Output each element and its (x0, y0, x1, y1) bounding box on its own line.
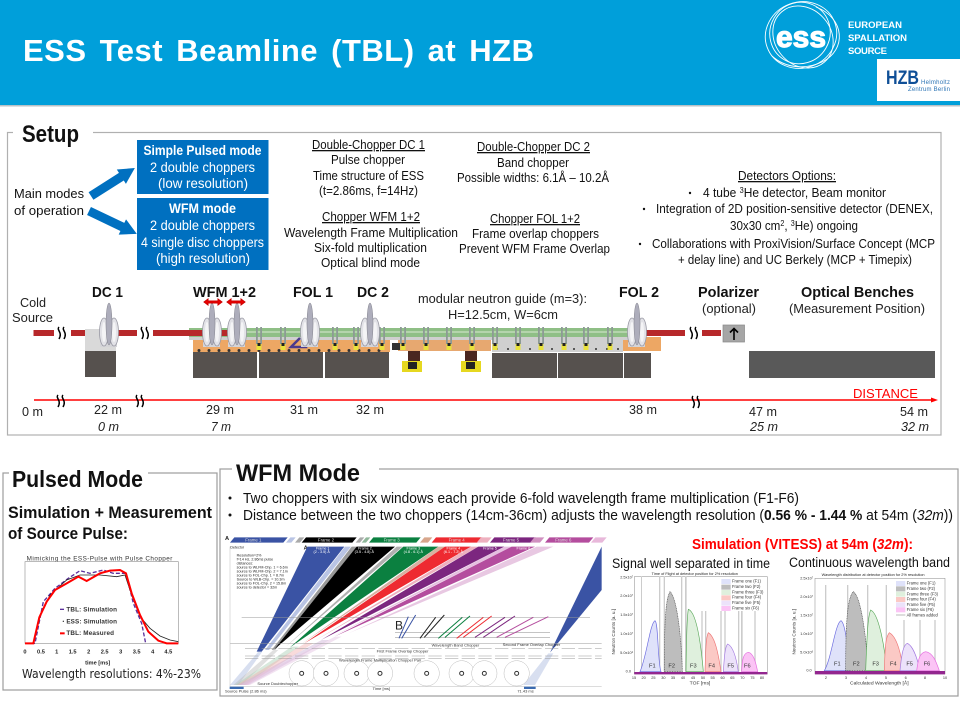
DC 1 base (85, 329, 116, 377)
beamline component labels: FOL 1 (293, 284, 333, 301)
x axis labels: 2 (87, 650, 90, 656)
legend: TBL: Measured (66, 630, 114, 637)
beamline component labels: DC 1 (92, 284, 123, 301)
frame color bar: Frame 6 (555, 538, 572, 543)
legend: Frame five (F5) (907, 602, 936, 607)
resolution notes: Source to WLB-Chp. = 10.3m (237, 577, 285, 581)
frame peaks: F1 (649, 663, 656, 669)
beamline schematic (34, 299, 935, 378)
axes labels: 15 (632, 676, 636, 680)
wedge labels: Frame 6 (517, 546, 530, 550)
arrow: to simple pulsed mode (86, 161, 139, 203)
text: wavelength resolutions: Wavelength resolutions: 4%-23% (22, 667, 201, 681)
resolution notes (230, 545, 288, 589)
beamline component labels: modular neutron guide (m=3): (418, 291, 587, 306)
axes labels: TOF [ms] (690, 681, 711, 687)
text: chopper WFM 1+2 (284, 209, 458, 270)
axes labels: 8 (924, 676, 926, 680)
axes labels: 10 (943, 676, 947, 680)
axes labels: 35 (671, 676, 675, 680)
text: detector options: 4 tube (703, 185, 739, 200)
x axis labels: 0.5 (37, 650, 45, 656)
frame peaks: F5 (906, 661, 913, 667)
logo: HZB: HZB (886, 68, 919, 89)
WFM adjustment arrows (204, 299, 245, 305)
beamline component labels: H=12.5cm, W=6cm (448, 307, 558, 322)
wedge labels: (3.5 - 4.8) Å (355, 549, 375, 554)
legend: Frame six (F6) (732, 605, 760, 610)
curve: ESS simulation (25, 575, 178, 643)
legend (721, 579, 764, 611)
frame peaks: F6 (744, 663, 751, 669)
bullet list: Two choppers with six windows each provide 6-fold wavelength frame multiplication (F1-F6) (243, 491, 799, 507)
axes labels: 30 (661, 676, 665, 680)
text: chopper WFM 1+2: Wavelength Frame Multiplication (284, 225, 458, 240)
text: double-chopper DC 1: Pulse chopper (331, 152, 406, 167)
beamline component labels: Source (12, 310, 53, 325)
letter A labels: A (225, 536, 229, 542)
distance axis: 32 m (356, 402, 384, 417)
frame peaks: F5 (727, 663, 734, 669)
wedge labels: (2 - 3.5) Å (314, 549, 330, 554)
legend: Frame five (F5) (732, 600, 761, 605)
resolution notes: Resolution=2% (237, 553, 262, 557)
text: double-chopper DC 2: Band chopper (497, 155, 570, 170)
wedge labels: Frame 4 (447, 546, 460, 550)
axes labels: 1.5x10⁷ (620, 613, 634, 617)
inset B: B (395, 618, 403, 632)
beamline component labels: DC 2 (357, 284, 389, 301)
header banner (0, 0, 960, 106)
legend: Frame four (F4) (732, 595, 762, 600)
text: signal well separated in time: Signal well separated in time (612, 556, 770, 571)
heading: pulsed mode: Pulsed Mode (12, 466, 143, 492)
logo: European Spallation Source: EUROPEAN (848, 20, 902, 31)
beamline component labels: Polarizer (698, 284, 759, 301)
axes labels: 6 (905, 676, 907, 680)
x axis labels: time [ms] (85, 661, 110, 667)
chart: time of flight (611, 572, 767, 687)
text: double-chopper DC 1: Double-Chopper DC 1 (312, 137, 425, 152)
x axis labels: 2.5 (101, 650, 109, 656)
distance axis: 25 m (749, 419, 778, 434)
chart: wavelength distribution: Wavelength distribution at detector position for 2% resolution (822, 573, 925, 577)
axes labels (792, 576, 947, 687)
resolution notes: source to FOL-Chp. 1 = 8.7m (237, 573, 284, 577)
distance axis: 54 m (900, 404, 928, 419)
axes labels: 5.0x10⁶ (620, 651, 634, 655)
frame color bar: Frame 5 (503, 538, 520, 543)
legend: Frame one (F1) (732, 579, 761, 584)
wedge labels (314, 546, 530, 554)
frame color bar: Frame 2 (318, 538, 335, 543)
text: double-chopper DC 1: Time structure of ESS (313, 168, 424, 183)
text: double-chopper DC 2: Possible widths: 6.1Å – 10.2Å (457, 170, 609, 185)
frame peaks: F2 (853, 661, 860, 667)
distance axis: 32 m (901, 419, 929, 434)
resolution notes: f=14 Hz, 2.86ms pulse (237, 557, 273, 561)
colored frame wedges (257, 547, 602, 653)
axes labels: 0.0 (806, 668, 812, 672)
chopper discs (289, 661, 529, 686)
distance axis: 31 m (290, 402, 318, 417)
guide pedestals (392, 343, 481, 372)
box: WFM mode: 4 single disc choppers (141, 234, 264, 250)
axes labels: 80 (760, 676, 764, 680)
neutron beam (34, 327, 721, 339)
logo: European Spallation Source: ess (776, 21, 826, 54)
curve: TBL simulation (25, 570, 146, 643)
axes labels: Calculated Wavelength [Å] (850, 680, 909, 687)
text: detector options: , (784, 218, 791, 233)
distance axis: 38 m (629, 402, 657, 417)
neutron guide (189, 328, 640, 340)
box: simple pulsed mode: (low resolution) (158, 175, 248, 191)
frame color bar: Frame 1 (245, 538, 262, 543)
heading: setup: Setup (22, 121, 79, 148)
logo: HZB: Helmholtz (921, 80, 950, 86)
box: WFM mode: WFM mode (169, 200, 236, 216)
resolution notes: Detector (230, 545, 245, 549)
axes labels: 20 (642, 676, 646, 680)
text: double-chopper DC 2 (457, 139, 609, 185)
optical benches (749, 351, 935, 378)
frame color bar: Frame 4 (449, 538, 465, 543)
text: detector options: Integration of 2D position-sensitive detector (DENEX, (656, 201, 933, 216)
arrow: to WFM mode (85, 203, 140, 242)
distance axis (22, 386, 938, 434)
logo: HZB: Zentrum Berlin (908, 87, 950, 93)
distance axis: 0 m (22, 404, 43, 419)
frame color bar: Frame 3 (384, 538, 400, 543)
resolution notes: source to WLFM-Chp. 2 = 7.1m (237, 569, 288, 573)
wedge labels: Frame 1 (316, 546, 329, 550)
axes labels: 0.0 (626, 670, 631, 674)
x axis labels: 1.5 (69, 650, 77, 656)
text: detector options: Detectors Options: (738, 168, 836, 183)
diagram labels: 71.43 ms (517, 688, 534, 693)
x axis labels: 0 (23, 650, 27, 656)
legend (896, 581, 939, 617)
light rays from source (230, 637, 553, 685)
chart: time of flight: Time of Flight at detector position for 2% resolution (652, 572, 738, 576)
box: WFM mode: (high resolution) (156, 250, 250, 266)
inset B (395, 615, 550, 638)
distance axis: 7 m (211, 419, 231, 434)
baseline band (634, 672, 767, 674)
text: detector options: 30x30 cm (730, 218, 786, 233)
subheading: simulation and measurement: of Source Pulse: (8, 524, 128, 543)
wedge labels: Frame 3 (407, 546, 420, 550)
panel: WFM mode (220, 460, 958, 696)
diagram labels: Wavelength Band Chopper (432, 643, 480, 648)
resolution notes: source to detector = 32m (237, 585, 277, 589)
x axis labels: 1 (55, 650, 58, 656)
axes labels: Neutron Counts [a. u.] (792, 609, 797, 654)
logo: HZB (877, 59, 960, 101)
wedge labels: (4.8 - 6.1) Å (404, 549, 424, 554)
choppers (100, 303, 646, 347)
diagram labels: Source Pulse (2.86 ms) (225, 688, 267, 693)
axes labels: 65 (730, 676, 734, 680)
resolution notes: distances: (237, 561, 253, 565)
wedge labels: Frame 2 (358, 546, 372, 550)
x axis labels: 3.5 (133, 650, 141, 656)
legend: Frame six (F6) (907, 607, 934, 612)
axes labels (611, 576, 764, 687)
axes labels: 50 (701, 676, 705, 680)
text: main modes of operation (14, 186, 84, 218)
text: detector options: Collaborations with ProxiVision/Surface Concept (MCP (652, 236, 935, 251)
distance grid lines (230, 547, 602, 687)
axes labels: 2 (825, 676, 827, 680)
legend: Frame two (F2) (907, 586, 936, 591)
chart: source pulse (23, 556, 178, 667)
panel: setup (8, 121, 941, 435)
chart: wavelength distribution (792, 573, 947, 687)
axes labels: 5 (885, 676, 887, 680)
letter A labels: A (304, 545, 308, 551)
axes labels: 1.0x10⁷ (620, 632, 634, 636)
frame peaks: F4 (890, 661, 897, 667)
diagram labels (225, 642, 561, 693)
polarizer (723, 325, 744, 342)
diagram labels: Time [ms] (373, 686, 390, 691)
wedge labels: (6.1 - 7.2) Å (444, 549, 464, 554)
purple wedge at FOL 1 (291, 326, 306, 347)
bullet list (228, 491, 953, 524)
box: simple pulsed mode (137, 140, 268, 194)
curve: TBL measured (25, 570, 178, 643)
title: ESS Test Beamline (TBL) at HZB (23, 33, 534, 68)
axes labels: 2.5x10⁷ (800, 576, 814, 580)
diagram labels: Second Frame Overlap Chopper (503, 642, 561, 647)
text: detector options: 3 (791, 219, 795, 228)
beamline component labels: Optical Benches (801, 284, 914, 301)
axes labels: 45 (691, 676, 695, 680)
legend: Frame three (F3) (732, 589, 764, 594)
diagram labels: Source Doublechopper (257, 681, 299, 686)
letter A labels (225, 536, 308, 551)
axes labels: 75 (750, 676, 754, 680)
resolution notes: source to FOL-Chp. 2 = 15.8m (237, 581, 286, 585)
box: WFM mode: 2 double choppers (150, 217, 255, 233)
legend: Frame three (F3) (907, 591, 939, 596)
distance axis: 0 m (98, 419, 119, 434)
logo: European Spallation Source: SOURCE (848, 46, 887, 57)
subheading: simulation and measurement (8, 503, 212, 543)
text: detector options: 2 (780, 219, 785, 228)
distance axis: 47 m (749, 404, 777, 419)
heading: simulation VITESS: Simulation (VITESS) at 54m (32m): (692, 537, 913, 553)
frame peaks: F2 (668, 663, 675, 669)
text: main modes of operation: Main modes (14, 186, 84, 201)
text: double-chopper DC 1 (312, 137, 425, 198)
axes labels: 1.5x10⁷ (800, 613, 814, 617)
text: chopper FOL 1+2: Prevent WFM Frame Overlap (459, 241, 610, 256)
axes labels: 2.0x10⁷ (620, 594, 634, 598)
frame peaks: F6 (924, 661, 930, 667)
beamline component labels: FOL 2 (619, 284, 659, 301)
x axis labels: 4.5 (164, 650, 172, 656)
subheading: simulation and measurement: Simulation + Measurement (8, 503, 212, 522)
text: continuous wavelength band: Continuous wavelength band (789, 555, 950, 570)
axes labels: 4 (865, 676, 868, 680)
panel: pulsed mode (3, 465, 217, 690)
diagram labels: First Frame Overlap Chopper (377, 648, 429, 653)
x axis labels: 4 (151, 650, 155, 656)
legend (60, 606, 117, 637)
text: detector options: + delay line) and UC Berkely (MCP + Timepix) (678, 252, 912, 267)
axes labels: Neutron Counts [a. u.] (611, 609, 616, 654)
heading: WFM mode: WFM Mode (236, 460, 360, 487)
text: chopper FOL 1+2: Chopper FOL 1+2 (490, 211, 580, 226)
wedge labels: Frame 5 (483, 546, 497, 550)
text: chopper WFM 1+2: Chopper WFM 1+2 (322, 209, 420, 224)
beamline component labels (12, 284, 925, 325)
axes labels: 2.5x10⁷ (620, 576, 634, 580)
diagram: wavelength frame multiplication (225, 536, 607, 693)
legend: ESS: Simulation (66, 618, 117, 625)
text: chopper FOL 1+2 (459, 211, 610, 256)
bullet list: Distance between the two choppers (14cm-36cm) adjusts the wavelength resolution (0.56 % - 1.44 % at 54m (32m)) (243, 508, 953, 524)
distance axis: DISTANCE (853, 386, 918, 401)
frame peaks: F3 (872, 661, 879, 667)
window markers (825, 585, 936, 671)
box: simple pulsed mode: 2 double choppers (150, 159, 255, 175)
beamline component labels: (Measurement Position) (789, 301, 925, 316)
text: detector options: He detector, Beam monitor (744, 185, 887, 200)
logo: European Spallation Source (756, 0, 907, 80)
text: main modes of operation: of operation (14, 203, 84, 218)
text: detector options (639, 168, 935, 267)
legend: TBL: Simulation (66, 606, 117, 613)
frame peaks (640, 592, 758, 672)
legend: All frames added (907, 612, 939, 617)
axes labels: 1.0x10⁷ (800, 632, 814, 636)
text: double-chopper DC 1: (t=2.86ms, f=14Hz) (319, 183, 418, 198)
chart: source pulse: Mimicking the ESS-Pulse with Pulse Chopper (27, 556, 172, 563)
x axis labels (23, 650, 172, 667)
x axis labels: 3 (119, 650, 122, 656)
frame peaks: F3 (690, 663, 697, 669)
frame peaks: F1 (834, 661, 841, 667)
axes labels: 2.0x10⁷ (800, 595, 814, 599)
box: WFM mode (137, 198, 268, 270)
legend: Frame one (F1) (907, 581, 936, 586)
frame peaks: F4 (708, 663, 715, 669)
diagram labels: Wavelength Frame Multiplication Chopper Pair (339, 657, 422, 662)
axes labels: 55 (711, 676, 715, 680)
frame peaks (824, 592, 939, 671)
text: detector options: 3 (740, 186, 744, 195)
legend: Frame two (F2) (732, 584, 761, 589)
text: double-chopper DC 2: Double-Chopper DC 2 (477, 139, 590, 154)
source pulse bars (230, 687, 536, 689)
text: chopper WFM 1+2: Optical blind mode (321, 255, 420, 270)
text: chopper FOL 1+2: Frame overlap choppers (472, 226, 599, 241)
distance axis: 22 m (94, 402, 122, 417)
frame color bar (230, 537, 607, 543)
axes labels: 40 (681, 676, 685, 680)
baseline band (815, 671, 945, 674)
beamline component labels: Cold (20, 295, 46, 310)
text: detector options: He) ongoing (795, 218, 858, 233)
axes labels: 70 (740, 676, 744, 680)
beamline component labels: WFM 1+2 (193, 284, 256, 301)
resolution notes: source to WLFM-Chp. 1 = 6.6m (237, 565, 288, 569)
axes labels: 60 (721, 676, 725, 680)
window markers (641, 577, 756, 672)
logo: European Spallation Source: SPALLATION (848, 33, 907, 44)
axes labels: 5.0x10⁶ (800, 650, 814, 654)
legend: Frame four (F4) (907, 597, 936, 602)
beamline component labels: (optional) (702, 301, 756, 316)
axes labels: 3 (845, 676, 847, 680)
distance axis: 29 m (206, 402, 234, 417)
box: simple pulsed mode: Simple Pulsed mode (144, 142, 262, 158)
guide clamps (256, 327, 613, 350)
text: chopper WFM 1+2: Six-fold multiplication (314, 240, 427, 255)
axes labels: 25 (651, 676, 655, 680)
guide support blocks (193, 337, 661, 378)
